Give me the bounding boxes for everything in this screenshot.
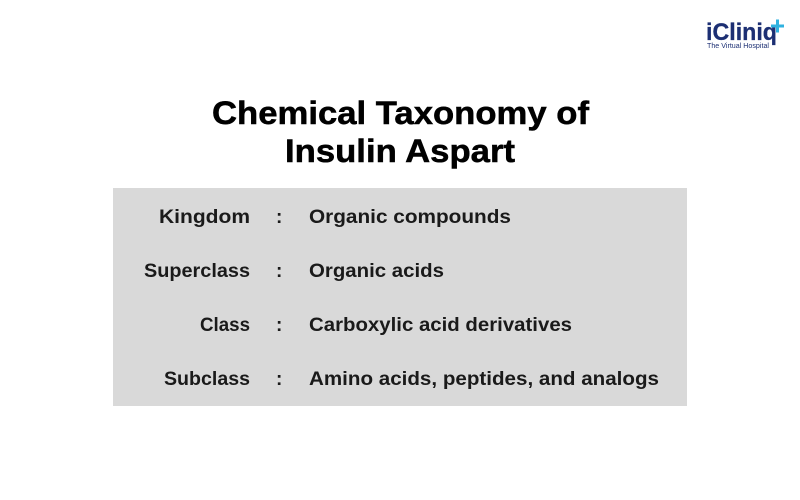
row: kingdom [159,207,511,228]
logo: iCliniq: The Virtual Hospital [707,43,769,50]
title: Insulin Aspart [285,133,515,169]
icon: plus [771,20,784,32]
row: superclass [144,261,444,282]
title [212,95,589,169]
row: class: Class [200,315,250,336]
row: subclass: : [276,369,282,390]
row: class: Carboxylic acid derivatives [309,315,572,336]
row: class: : [276,315,282,336]
row: kingdom: Kingdom [159,207,250,228]
row: superclass: Superclass [144,261,250,282]
row: superclass: Organic acids [309,261,444,282]
row: subclass [164,369,659,390]
row: superclass: : [276,261,282,282]
row: kingdom: Organic compounds [309,207,511,228]
panel: taxonomy table [113,188,687,406]
title: Chemical Taxonomy of [212,95,589,131]
row: subclass: Amino acids, peptides, and analogs [309,369,659,390]
logo: iCliniq: iCliniq [706,19,777,46]
row: kingdom: : [276,207,282,228]
row: subclass: Subclass [164,369,250,390]
row: class [200,315,572,336]
